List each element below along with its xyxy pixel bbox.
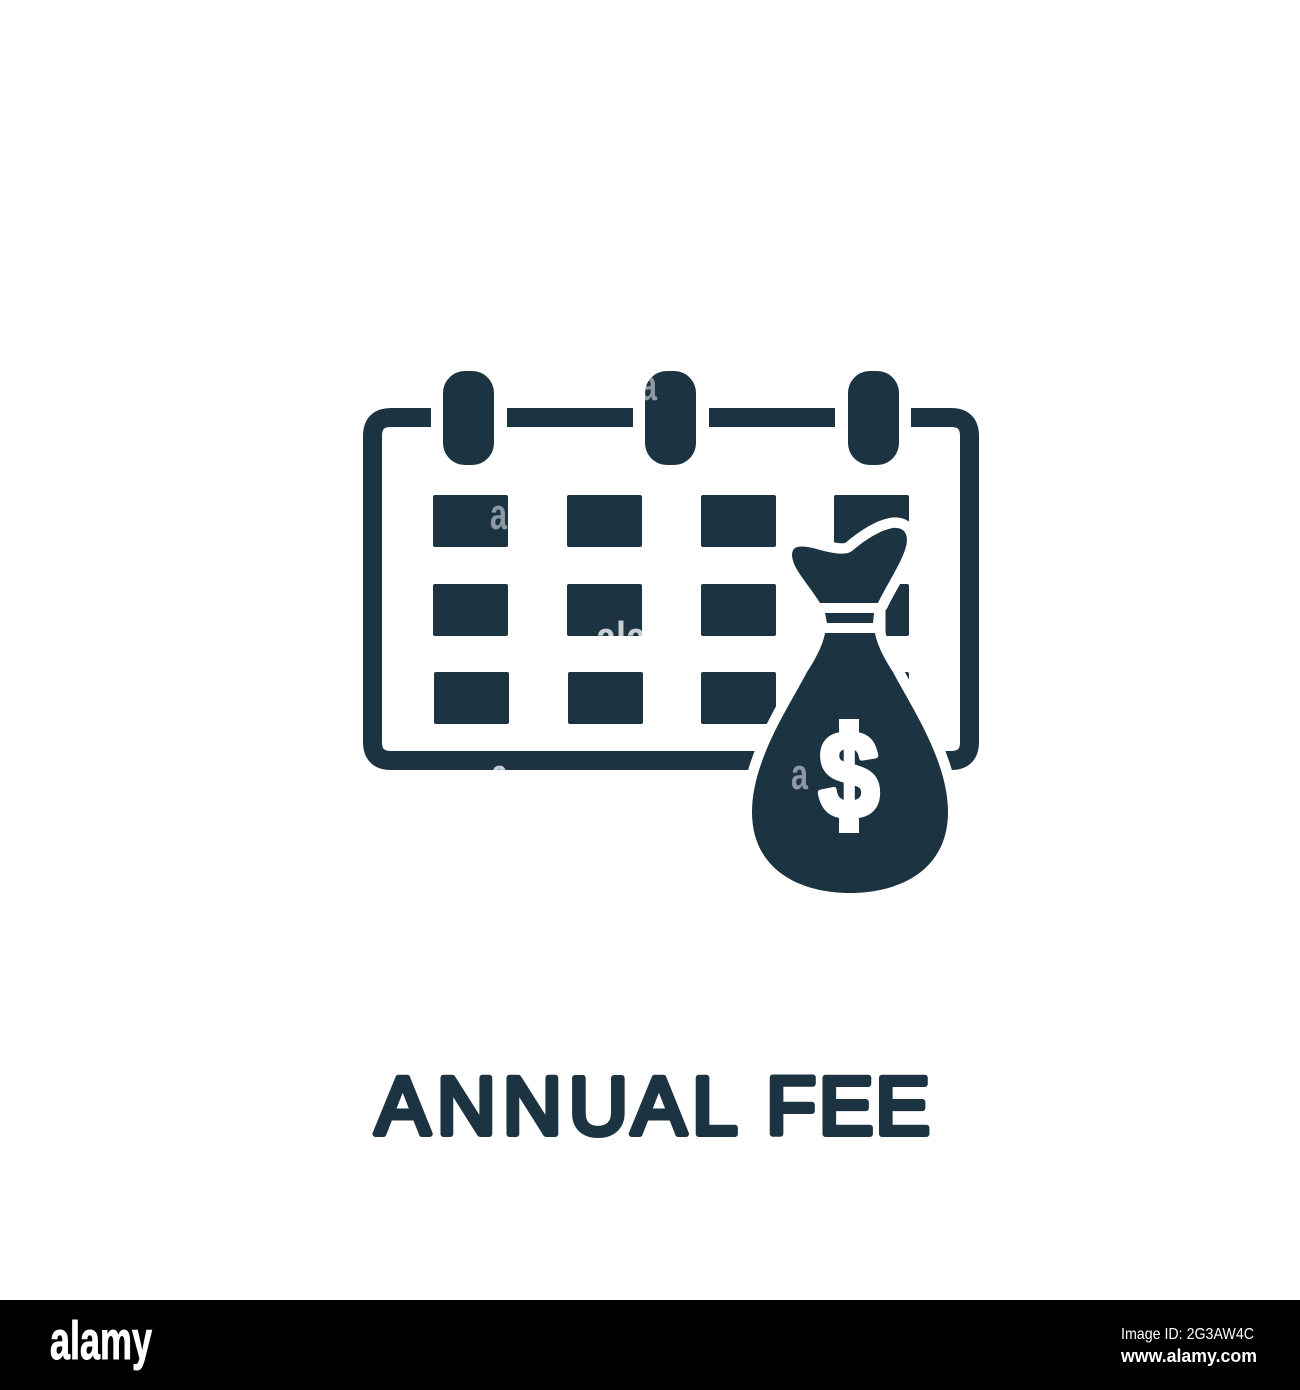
- watermark letter on bag: a: [791, 750, 808, 799]
- website: www.alamy.com: [1120, 1346, 1257, 1366]
- footer bar: [0, 1300, 1300, 1390]
- image id: Image ID: 2G3AW4C: [1121, 1326, 1254, 1343]
- watermark fragments on calendar: a: [490, 490, 507, 539]
- icon: calendar frame: [372, 418, 970, 760]
- money bag tie band: [825, 613, 874, 623]
- icon: calendar binder rings: [443, 371, 899, 465]
- icon: money bag: [752, 528, 948, 893]
- infographic canvas: [0, 371, 1300, 1390]
- watermark fragments on calendar: a: [491, 750, 508, 799]
- icon: calendar with money bag: [372, 361, 970, 893]
- watermark fragments on calendar: ala: [596, 613, 646, 662]
- icon: white halo around money bag: [752, 528, 948, 893]
- title: ANNUAL FEE: [375, 1061, 930, 1152]
- money bag knot: [792, 528, 907, 603]
- footer logo: alamy: [50, 1311, 152, 1371]
- icon: calendar day cells: [433, 495, 909, 724]
- watermark fragments on calendar: [490, 378, 658, 770]
- watermark fragments on calendar: a: [640, 361, 657, 410]
- icon: dollar sign: $: [819, 707, 879, 843]
- money bag body: [752, 633, 948, 893]
